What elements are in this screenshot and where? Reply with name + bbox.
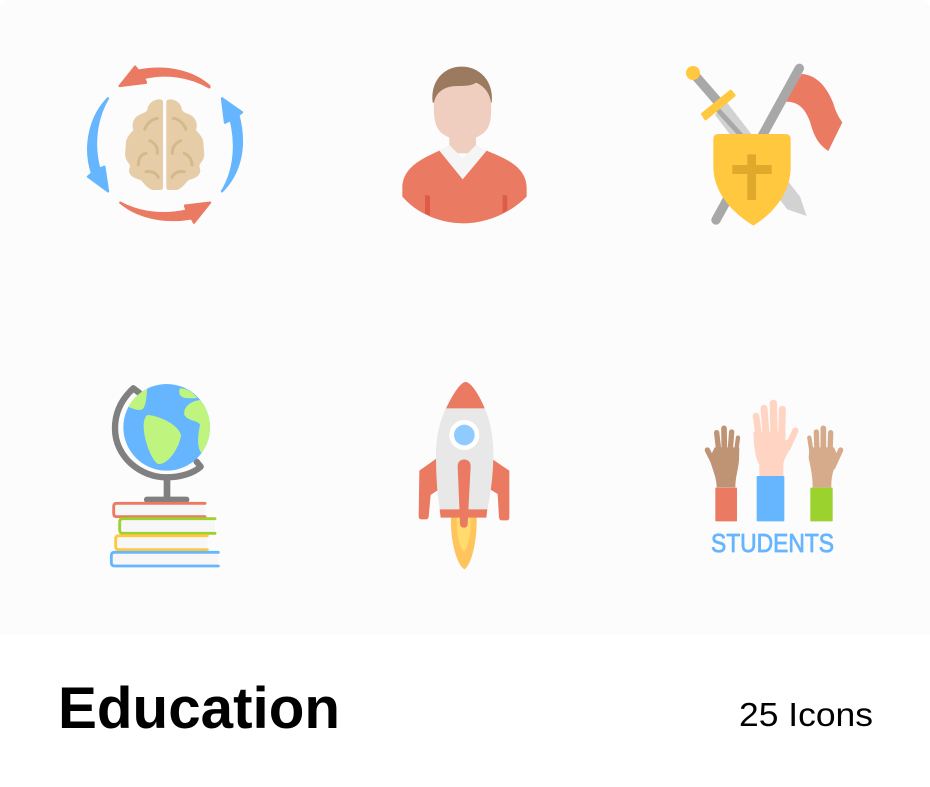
book: yellow — [116, 536, 207, 550]
globe base — [144, 497, 189, 503]
book: green — [120, 519, 215, 533]
book: red — [114, 503, 205, 517]
shirt — [402, 151, 527, 223]
blade fuller — [715, 107, 742, 136]
icon count: 25 Icons — [739, 696, 873, 733]
icon: globe on books — [111, 384, 218, 566]
collar — [439, 145, 487, 179]
left blue arrow — [88, 98, 108, 191]
window — [449, 420, 479, 450]
brain left half — [125, 99, 163, 190]
globe pole — [164, 477, 170, 498]
shirt arm seams — [425, 195, 430, 216]
flag — [786, 74, 842, 151]
icon: brain with cycle arrows — [88, 67, 242, 223]
outer flame — [451, 517, 477, 569]
base band — [440, 509, 487, 518]
top red arrow — [120, 67, 209, 87]
globe stand — [115, 388, 201, 477]
right hand — [809, 428, 841, 488]
middle hand — [753, 403, 795, 476]
flag pole — [716, 68, 799, 220]
face — [434, 83, 491, 140]
globe — [123, 384, 210, 471]
inner flame — [457, 517, 471, 552]
bottom red arrow — [120, 203, 210, 223]
icon: student avatar — [402, 67, 527, 223]
left cuff — [715, 488, 737, 521]
brain right half — [166, 99, 204, 190]
middle cuff — [757, 476, 784, 521]
right cuff — [810, 488, 833, 521]
nose cone — [446, 382, 485, 408]
icon: sword, flag and shield — [686, 66, 842, 226]
sword blade — [715, 100, 807, 216]
brain creases — [138, 118, 192, 177]
sword guard — [702, 91, 734, 119]
icon: rocket — [419, 382, 509, 569]
rocket body — [436, 408, 493, 510]
right fin — [490, 459, 509, 520]
left hand — [707, 428, 739, 487]
hair — [432, 67, 492, 103]
centre fin — [458, 459, 471, 528]
title: Education — [58, 676, 340, 741]
sword handle — [693, 73, 719, 103]
right blue arrow — [222, 98, 242, 191]
infographic canvas — [62, 64, 872, 728]
icon: raised hands with students label — [707, 403, 841, 521]
neck — [449, 130, 476, 153]
shield cross — [732, 154, 772, 200]
left fin — [419, 458, 438, 519]
continents — [128, 388, 210, 464]
book: blue — [111, 552, 218, 566]
students label: STUDENTS — [711, 528, 834, 558]
pommel — [686, 66, 700, 80]
shield — [713, 134, 791, 226]
